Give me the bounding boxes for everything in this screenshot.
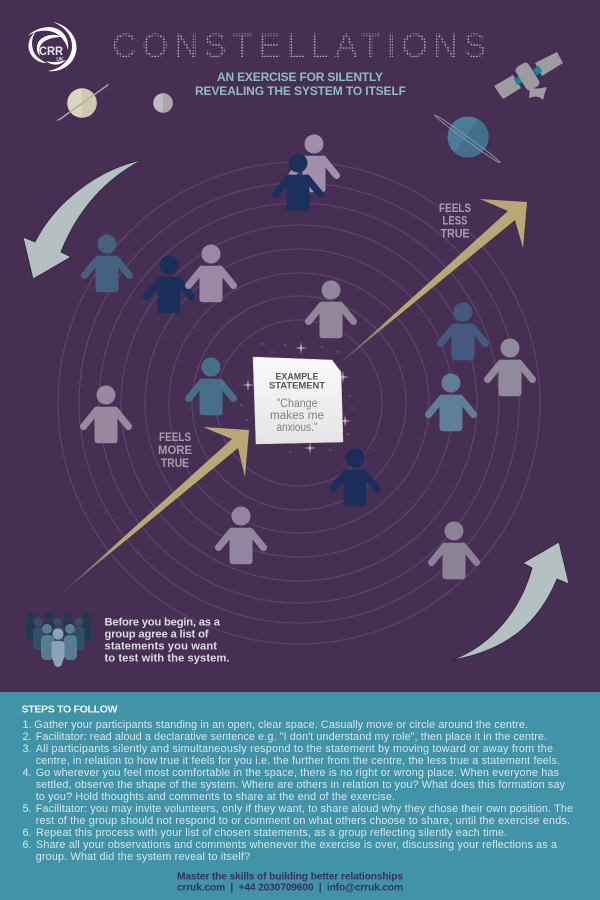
label: feels more true: [158, 430, 192, 470]
footer contact: Master the skills of building better relationships: [177, 872, 403, 882]
person teal right: [428, 374, 474, 431]
concentric rings: [58, 162, 540, 644]
card heading: EXAMPLE: [276, 372, 319, 382]
step list: 3.: [22, 743, 32, 755]
card statement text: anxious.": [276, 422, 318, 434]
card statement text: [270, 398, 324, 434]
person blue right: [440, 302, 486, 360]
title: dotted: CONSTELLATIONS: [112, 27, 486, 65]
step list: Gather your participants standing in an open, clear space. Casually move or circle around the centre.: [34, 719, 528, 731]
people: [84, 134, 532, 579]
step list: Facilitator: read aloud a declarative sentence e.g. "I don't understand my role", then place it in the centre.: [36, 731, 547, 743]
sparkles around statement: [240, 342, 353, 454]
heading: steps to follow: STEPS TO FOLLOW: [22, 704, 118, 716]
person dark bottom: [332, 448, 378, 506]
label: feels less true: FEELS: [439, 201, 471, 215]
card statement text: makes me: [270, 410, 324, 422]
step list: Share all your observations and comments whenever the exercise is over, discussing your reflections as a: [36, 839, 557, 851]
label: feels less true: TRUE: [440, 226, 470, 240]
text: before you begin: Before you begin, as a: [104, 616, 221, 628]
step list: 6.: [22, 827, 32, 839]
card statement text: "Change: [276, 398, 318, 410]
step list: settled, observe the shape of the system. Where are others in relation to you? What does this formation say: [36, 779, 566, 791]
person light bottom: [218, 506, 264, 564]
icon: group of people: [26, 611, 91, 667]
person light centre: [308, 280, 354, 338]
icon: saturn: [56, 84, 109, 121]
step list: group. What did the system reveal to itself?: [36, 851, 250, 863]
card heading: STATEMENT: [269, 380, 325, 392]
text: before you begin: statements you want: [104, 640, 217, 652]
step list: 5.: [22, 803, 32, 815]
icon: ringed blue planet: [434, 114, 501, 164]
subtitle: [195, 70, 406, 98]
arrow: curved arrow top left: [23, 160, 142, 279]
step list: centre, in relation to how true it feels for you i.e. the further from the centre, the less true a statement feels.: [36, 755, 560, 767]
arrow: curved arrow bottom right: [452, 542, 569, 660]
label: feels more true: TRUE: [161, 456, 189, 470]
person dark top: [276, 154, 320, 211]
label: feels more true: MORE: [158, 443, 192, 457]
person grey bottom right: [432, 522, 476, 579]
text: before you begin: to test with the system.: [104, 652, 230, 664]
subtitle: AN EXERCISE FOR SILENTLY: [217, 70, 383, 84]
subtitle: REVEALING THE SYSTEM TO ITSELF: [195, 84, 406, 98]
person light top: [292, 134, 336, 192]
arrow: gold toward more true: [63, 427, 249, 592]
logo: CRR UK: CRR: [39, 46, 64, 58]
step list: Go wherever you feel most comfortable in the space, there is no right or wrong place. When everyone has: [36, 767, 560, 779]
person grey right: [488, 338, 532, 396]
logo: CRR UK: [28, 22, 77, 71]
label: feels less true: [439, 201, 471, 240]
text: before you begin: group agree a list of: [104, 628, 209, 640]
logo: CRR UK: UK: [56, 57, 64, 63]
step list: Repeat this process with your list of chosen statements, as a group reflecting silently each time.: [36, 827, 507, 839]
step list: Facilitator: you may invite volunteers, only if they want, to share aloud why they chose their own position. The: [36, 803, 573, 815]
label: feels less true: LESS: [442, 214, 468, 228]
person dark left: [146, 256, 192, 313]
footer contact: [177, 872, 403, 894]
step list: 2.: [22, 731, 32, 743]
icon: moon: [153, 93, 173, 113]
label: feels more true: FEELS: [159, 430, 191, 444]
text: before you begin: [104, 616, 230, 664]
step list: [22, 719, 573, 863]
step list: to you? Hold thoughts and comments to share at the end of the exercise.: [36, 791, 395, 803]
person light left: [188, 244, 234, 302]
statement card: [253, 357, 343, 444]
arrow: gold toward less true: [338, 199, 527, 365]
card heading: [269, 372, 325, 392]
footer contact: crruk.com | +44 2030709600 | info@crruk.com: [177, 882, 403, 894]
step list: 6.: [22, 839, 32, 851]
person blue left: [84, 234, 130, 292]
step list: rest of the group should not respond to or comment on what others choose to share, until the exercise ends.: [36, 815, 570, 827]
panel: steps: [0, 692, 600, 900]
step list: All participants silently and simultaneously respond to the statement by moving toward or away from the: [36, 743, 553, 755]
step list: 4.: [22, 767, 32, 779]
person light far left: [84, 386, 128, 443]
person teal centre: [188, 358, 234, 415]
step list: 1.: [22, 719, 32, 731]
icon: satellite: [494, 52, 563, 100]
